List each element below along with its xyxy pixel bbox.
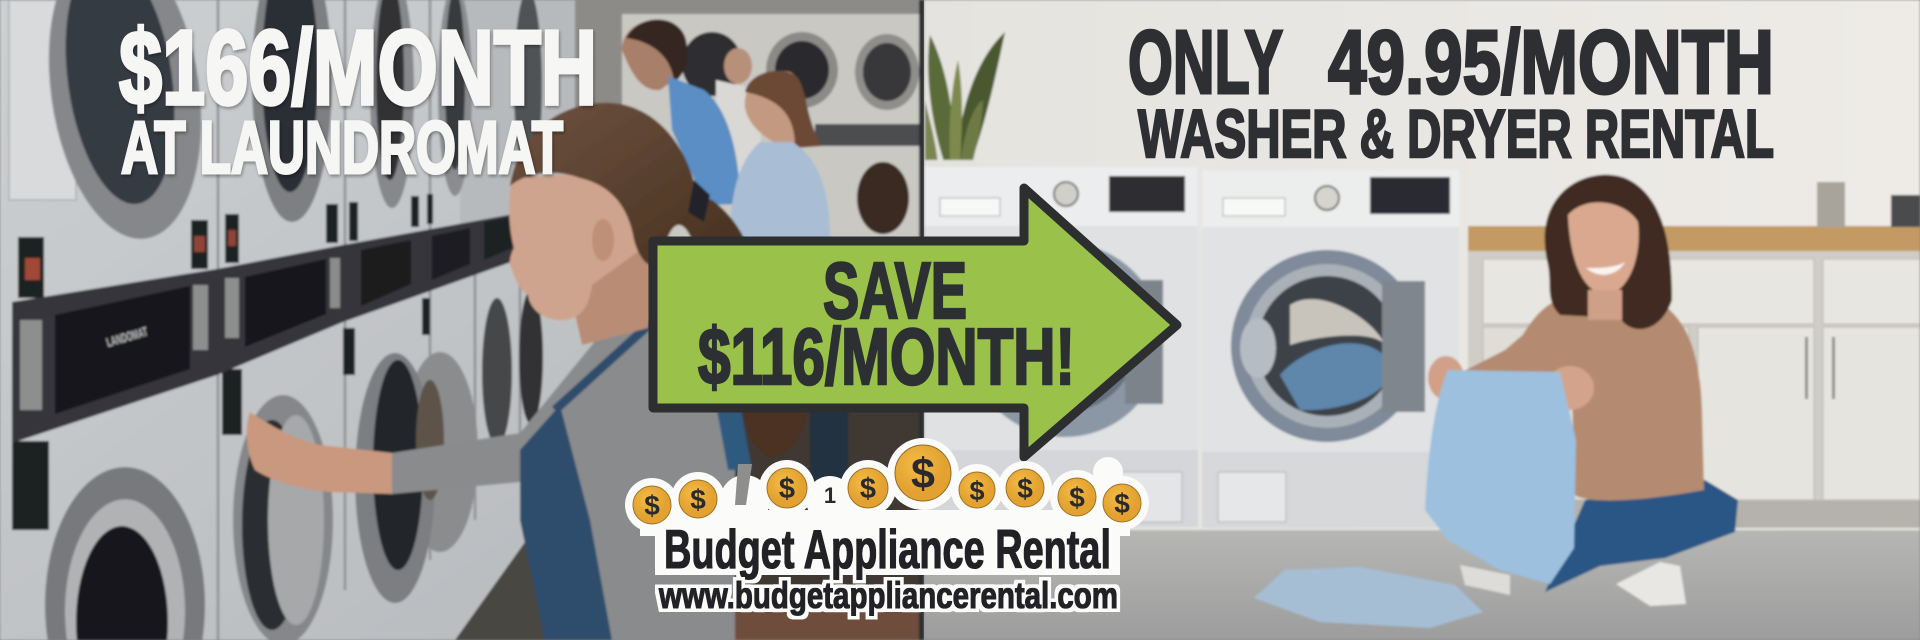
left washer (924, 167, 1198, 527)
divider (919, 0, 924, 640)
smiling woman with towel (1425, 175, 1738, 606)
plant (925, 32, 1005, 250)
arrow: save callout (653, 188, 1177, 457)
heading: rental price: 49.95/MONTH (1328, 13, 1774, 113)
dark lower background (735, 400, 922, 640)
coin-box displays (12, 194, 433, 530)
washer panel and seams (9, 0, 575, 640)
face (509, 170, 640, 320)
logo coins: $ (1069, 482, 1085, 513)
neck (572, 220, 662, 345)
logo white sticker backing (625, 438, 1149, 575)
heading: rental price: ONLY (1128, 13, 1283, 113)
shoes (1616, 562, 1686, 606)
heading: laundromat cost (119, 9, 597, 189)
panel: laundromat photo scene (0, 0, 924, 640)
floor behind the woman (455, 535, 590, 640)
lower washer doors (45, 290, 543, 640)
laundromat customer (247, 103, 806, 640)
logo name: Budget Appliance Rental (664, 518, 1111, 580)
machine label: LANDOMAT (105, 324, 149, 350)
hands (1428, 356, 1464, 400)
jeans (1545, 480, 1738, 592)
heading: rental price (1128, 13, 1774, 172)
upper washer doors (31, 0, 542, 249)
arrow heading: SAVE (823, 246, 967, 335)
logo: Budget Appliance Rental (625, 438, 1149, 616)
arrow amount: $116/MONTH! (698, 312, 1075, 401)
logo coins: $ (1017, 473, 1033, 504)
hair and ponytail (510, 103, 745, 266)
logo coins: $ (911, 450, 935, 498)
heading: laundromat cost: $166/MONTH (119, 9, 597, 127)
logo coins (633, 445, 1141, 524)
logo coins: $ (1114, 488, 1130, 519)
logo coins: 1 (824, 483, 836, 508)
folded laundry (1254, 567, 1483, 628)
cabinets and counter (1468, 182, 1920, 528)
logo coins: $ (969, 476, 985, 506)
dark control band (12, 214, 514, 443)
right washer (1202, 170, 1459, 528)
logo website: www.budgetappliancerental.com (658, 575, 1118, 616)
logo coins: $ (644, 490, 660, 521)
torso and sleeves (1502, 295, 1704, 500)
back wall and background washers (570, 0, 922, 245)
logo coins: $ (690, 484, 706, 515)
background people (622, 19, 830, 240)
logo coins: $ (779, 473, 795, 505)
sub-heading: at laundromat: AT LAUNDROMAT (121, 106, 563, 189)
panel: home laundry photo scene (924, 0, 1920, 640)
logo coins: $ (860, 473, 876, 505)
towel (1425, 370, 1576, 584)
hair and face (1545, 175, 1672, 329)
